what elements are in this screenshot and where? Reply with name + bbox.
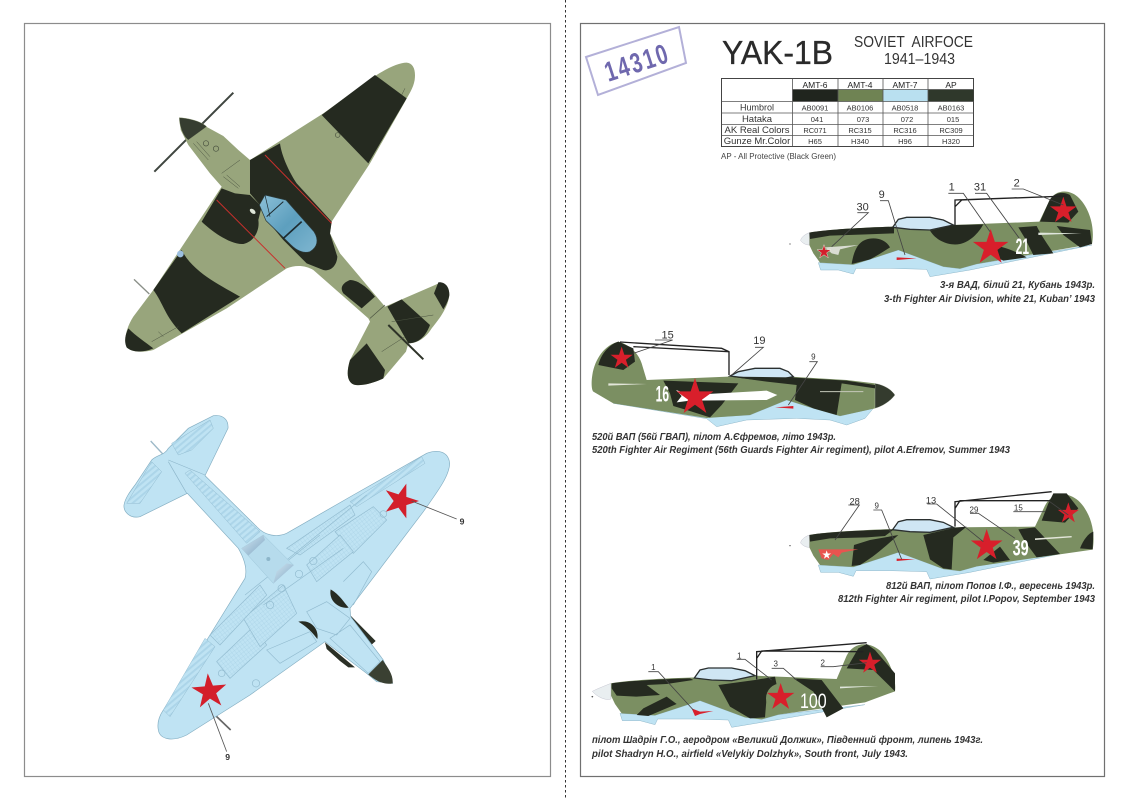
table note: AP - All Protective (Black Green) <box>721 152 836 161</box>
caption 4: pilot Shadryn H.O., airfield «Velykiy Dolzhyk», South front, July 1943. <box>591 748 908 760</box>
profile 2: white 16 <box>592 330 895 427</box>
profile 1: white 21: 9 <box>879 189 885 201</box>
colour swatches <box>792 90 974 102</box>
paint table: H340 <box>851 137 869 146</box>
panel: colour schemes <box>580 24 1104 776</box>
stamp: 14310: 14310 <box>601 38 674 88</box>
profile 1: white 21: 30 <box>857 202 869 214</box>
callout: 9 right <box>412 501 465 526</box>
profile 3: white 39: 29 <box>970 505 979 514</box>
paint table: 041 <box>811 115 823 124</box>
profile 2: white 16: 19 <box>753 335 765 347</box>
profile 1: white 21: 31 <box>974 182 986 194</box>
profile 2: white 16: 9 <box>811 352 816 361</box>
profile 3: white 39 <box>789 492 1094 579</box>
underside view aircraft <box>124 415 465 762</box>
paint table: AK Real Colors <box>725 125 790 136</box>
paint table: AB0163 <box>938 104 964 112</box>
icon: red star wing left <box>190 672 228 708</box>
caption 4 <box>591 734 983 760</box>
paint table: H65 <box>808 137 822 146</box>
paint table: RC071 <box>803 126 827 135</box>
paint table: 015 <box>947 115 959 124</box>
paint table: AMT-6 <box>802 80 828 90</box>
profile 4: white 100: 2 <box>820 658 825 667</box>
caption 1: 3-я ВАД, білий 21, Кубань 1943р. <box>940 279 1095 291</box>
paint table: AB0091 <box>802 104 828 112</box>
paint table: AB0106 <box>847 104 873 112</box>
profile 4: white 100: 1 <box>737 651 742 660</box>
caption 2: 520th Fighter Air Regiment (56th Guards Fighter Air regiment), pilot A.Efremov, Summer 1943 <box>592 444 1010 456</box>
paint table: RC316 <box>893 126 917 135</box>
paint table: RC309 <box>939 126 963 135</box>
caption 4: пілот Шадрін Г.О., аеродром «Великий Должик», Південний фронт, липень 1943г. <box>592 734 983 746</box>
profile 2: white 16: 15 <box>662 330 674 342</box>
profile 3: white 39: 15 <box>1014 504 1023 513</box>
profile 4: white 100: 3 <box>773 660 778 669</box>
caption 3 <box>838 580 1095 605</box>
profile 1: white 21: 2 <box>1014 178 1020 190</box>
subtitle <box>854 34 973 68</box>
caption 2 <box>592 431 1010 456</box>
paint table: AB0518 <box>892 104 918 112</box>
paint table: 072 <box>901 115 913 124</box>
icon: red star wing right <box>379 478 423 520</box>
profile 4: white 100 <box>591 643 895 727</box>
profile 3: white 39: 28 <box>849 496 860 506</box>
profile 3: white 39: 13 <box>926 495 936 505</box>
paint table: Hataka <box>742 114 773 125</box>
paint table: AMT-4 <box>847 80 873 90</box>
paint table: H96 <box>898 137 912 146</box>
caption 1: 3-th Fighter Air Division, white 21, Kuban’ 1943 <box>884 293 1095 305</box>
paint table <box>722 78 974 147</box>
caption 1 <box>884 279 1095 305</box>
profile 2: white 16: 16 <box>656 381 669 406</box>
paint table: Humbrol <box>740 102 774 112</box>
profile 3: white 39: 9 <box>874 501 879 510</box>
profile 4: white 100: 100 <box>800 689 827 713</box>
stamp: 14310 <box>586 27 686 95</box>
subtitle: SOVIET AIRFOCE <box>854 34 973 51</box>
icon: canopy <box>259 195 317 252</box>
paint table: RC315 <box>848 126 872 135</box>
callout: 9 left: 9 <box>225 752 230 762</box>
paint table: AP <box>945 80 957 90</box>
caption 2: 520й ВАП (56й ГВАП), пілот А.Єфремов, літо 1943р. <box>592 431 836 443</box>
callout: 9 right: 9 <box>460 516 465 526</box>
paint table: 073 <box>857 115 869 124</box>
paint table: Gunze Mr.Color <box>724 136 790 147</box>
caption 3: 812th Fighter Air regiment, pilot I.Popov, September 1943 <box>838 593 1095 605</box>
panel: plan views <box>24 24 550 776</box>
title: YAK-1B <box>722 34 833 71</box>
top view aircraft <box>125 63 449 385</box>
callout: 9 left <box>208 703 230 762</box>
caption 3: 812й ВАП, пілот Попов І.Ф., вересень 1943р. <box>886 580 1095 592</box>
paint table: AMT-7 <box>892 80 918 90</box>
profile 1: white 21: 1 <box>949 182 955 194</box>
profile 4: white 100: 1 <box>651 663 656 672</box>
subtitle: 1941–1943 <box>884 51 955 68</box>
profile 1: white 21 <box>789 178 1093 277</box>
profile 3: white 39: 39 <box>1013 535 1029 560</box>
paint table: H320 <box>942 137 960 146</box>
profile 1: white 21: 21 <box>1016 234 1029 259</box>
